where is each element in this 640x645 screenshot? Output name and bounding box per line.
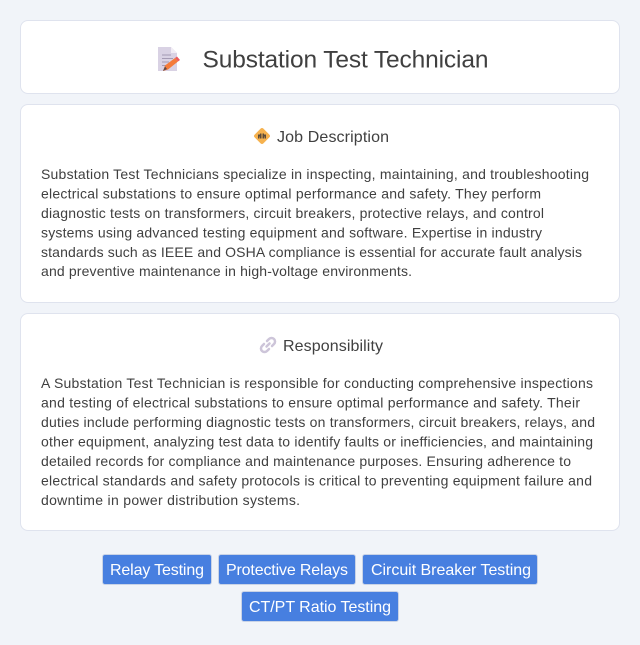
text: job description body: standards such as IEEE and OSHA compliance is essential for accurate fault analysis (41, 244, 582, 260)
icon: document with pencil (158, 47, 180, 71)
text: responsibility body: electrical standards and safety protocols is critical to preventing equipment failure and (41, 472, 592, 488)
text: responsibility body: detailed records for compliance and maintenance purposes. Ensuring adherence to (41, 453, 571, 469)
text: responsibility body: downtime in power distribution systems. (41, 492, 300, 508)
text: job description body: Substation Test Technicians specialize in inspecting, maintaining, and troubleshooting (41, 166, 589, 182)
panel: title card (20, 20, 620, 94)
title: Substation Test Technician (202, 46, 488, 74)
text: responsibility body: other equipment, analyzing test data to identify faults or inefficiencies, and maintaining (41, 434, 593, 450)
text: job description body: electrical substations to ensure optimal performance and safety. They perform (41, 186, 541, 202)
text: job description body: diagnostic tests on transformers, circuit breakers, protective relays, and control (41, 205, 544, 221)
heading: job description: Job Description (277, 129, 389, 146)
tag: relay testing (102, 554, 212, 585)
tag: CT/PT ratio testing: CT/PT Ratio Testing (249, 599, 391, 616)
tag: protective relays (218, 554, 356, 585)
icon: chain link (260, 336, 276, 354)
tag: circuit breaker testing (362, 554, 538, 585)
text: responsibility body: A Substation Test Technician is responsible for conducting comprehensive inspections (41, 375, 593, 391)
icon: orange diamond (254, 128, 270, 144)
text: responsibility body (41, 375, 595, 508)
text: job description body: systems using advanced testing equipment and software. Expertise in industry (41, 224, 542, 240)
text: responsibility body: and testing of electrical substations to ensure optimal performance and safety. Their (41, 394, 580, 410)
text: responsibility body: duties include performing diagnostic tests on transformers, circuit breakers, relays, and (41, 414, 595, 430)
tag: protective relays: Protective Relays (226, 562, 348, 579)
heading: responsibility: Responsibility (283, 338, 383, 355)
text: job description body: and preventive maintenance in high-voltage environments. (41, 263, 412, 279)
panel: responsibility (20, 313, 620, 531)
text: job description body (41, 166, 589, 279)
tag: CT/PT ratio testing (241, 591, 399, 622)
tag: circuit breaker testing: Circuit Breaker Testing (371, 562, 531, 579)
panel: job description (20, 104, 620, 303)
tag: relay testing: Relay Testing (110, 562, 204, 579)
